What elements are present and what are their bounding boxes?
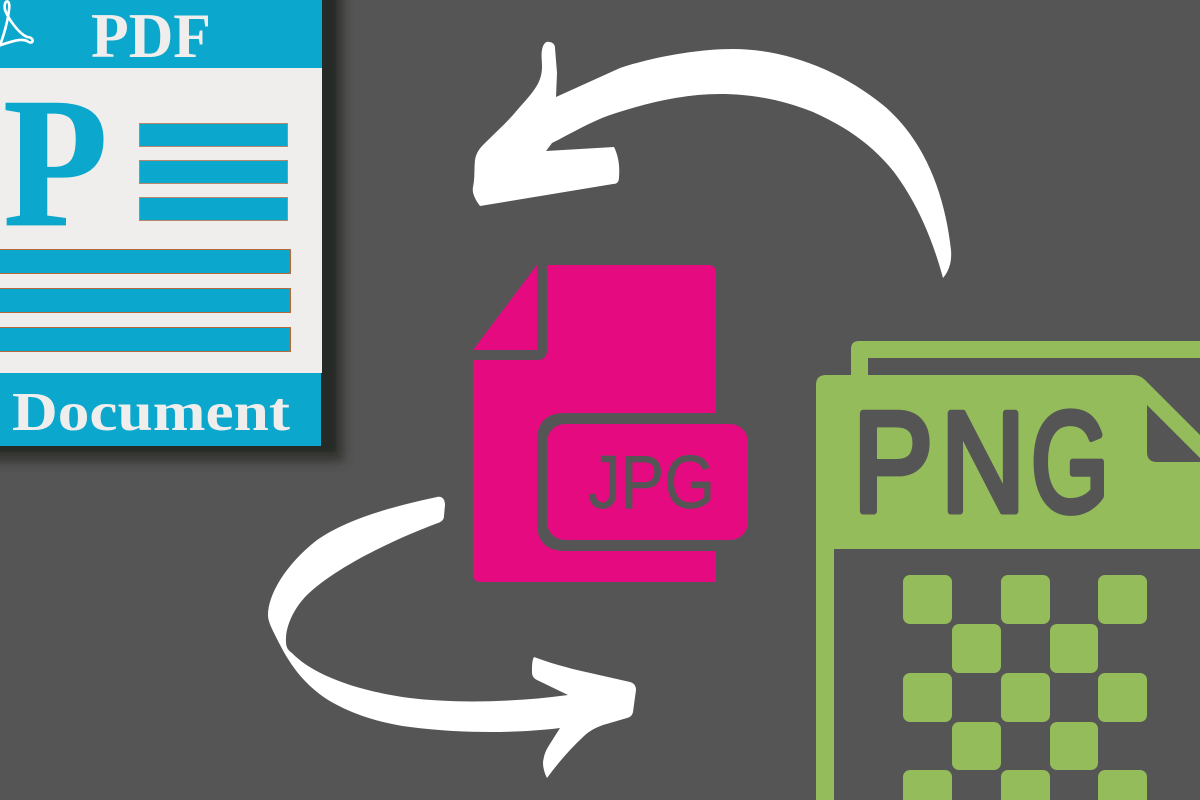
label: PNG: G [1031,383,1109,542]
file type badge [547,424,748,540]
icon: PDF document [0,0,344,462]
icon: Acrobat logo [0,1,33,46]
label: PNG: P [853,383,933,542]
PDF header band [0,0,322,68]
short text lines [140,124,288,220]
back page outline [851,341,1200,380]
label: PNG [853,383,1109,542]
label: JPG: JPG [588,440,715,524]
icon: PNG file [816,341,1200,800]
heading: PDF: PDF [91,0,211,71]
arrow: JPG to PNG [268,497,636,778]
icon: JPG file [473,265,748,582]
label: Document: Document [12,381,291,442]
checkerboard transparency pattern [903,575,1147,800]
label: PNG: N [941,383,1025,542]
large letter P: P [3,60,108,266]
page body [473,265,716,582]
footer band [0,373,321,446]
file body header [816,375,1200,800]
arrow: PNG to PDF [473,42,951,278]
page fold [473,265,537,350]
long text lines [0,250,290,352]
